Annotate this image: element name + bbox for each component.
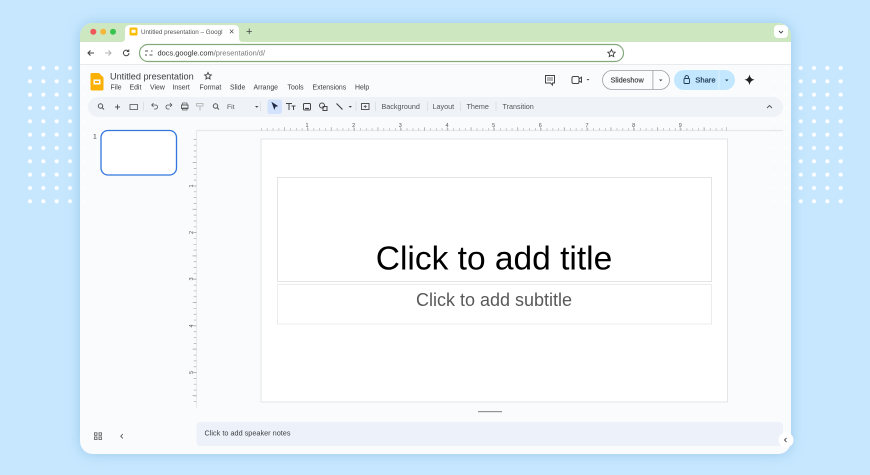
share button: Share bbox=[695, 76, 716, 84]
menu bar: View bbox=[150, 85, 165, 92]
browser window bbox=[80, 23, 794, 454]
url text: docs.google.com/presentation/d/ bbox=[158, 48, 266, 58]
slide thumbnail bbox=[101, 130, 176, 175]
horizontal ruler numbers: 2 bbox=[352, 123, 355, 129]
tab strip bbox=[80, 23, 791, 65]
slide canvas bbox=[261, 139, 728, 402]
slide number: 1 bbox=[93, 134, 97, 140]
collapse filmstrip icon bbox=[121, 434, 123, 438]
forward arrow bbox=[105, 50, 111, 56]
menu bar: Format bbox=[200, 85, 221, 92]
speaker notes bbox=[196, 422, 783, 446]
horizontal ruler numbers bbox=[305, 123, 682, 129]
horizontal ruler numbers: 5 bbox=[492, 123, 495, 129]
menu bar: Insert bbox=[172, 85, 190, 92]
menu bar: Arrange bbox=[254, 85, 278, 92]
toolbar labels: Transition bbox=[502, 102, 534, 111]
menu bar: Edit bbox=[130, 85, 141, 92]
zoom label: Fit bbox=[227, 104, 235, 111]
menu bar: File bbox=[110, 85, 122, 92]
active tab: × bbox=[229, 26, 234, 36]
docs logo bbox=[90, 73, 104, 90]
ruler bbox=[189, 123, 783, 408]
dot pattern left bbox=[23, 61, 77, 208]
subtitle placeholder: Click to add subtitle bbox=[416, 290, 572, 310]
menu bar: Slide bbox=[230, 85, 245, 92]
gemini sparkle bbox=[744, 74, 754, 85]
horizontal ruler numbers: 8 bbox=[632, 123, 635, 129]
vertical ruler numbers: 2 bbox=[189, 231, 195, 234]
site settings icon bbox=[145, 51, 152, 55]
dot pattern right bbox=[794, 61, 847, 208]
slideshow button: Slideshow bbox=[610, 76, 644, 84]
faint dots behind window bbox=[80, 61, 791, 208]
menu bar: Tools bbox=[288, 85, 304, 92]
vertical ticks bbox=[194, 139, 196, 402]
vertical ruler numbers: 3 bbox=[189, 277, 195, 281]
address bar bbox=[140, 44, 624, 62]
title placeholder bbox=[278, 178, 712, 282]
new tab button: + bbox=[246, 26, 252, 38]
vertical ruler numbers: 5 bbox=[189, 371, 195, 374]
title placeholder: Click to add title bbox=[376, 240, 612, 278]
notes resize handle bbox=[478, 411, 502, 412]
toolbar icons bbox=[98, 103, 219, 110]
grid view icon bbox=[94, 433, 102, 440]
toolbar separators bbox=[144, 102, 496, 111]
vertical ruler numbers bbox=[189, 184, 195, 374]
share button bbox=[674, 70, 735, 90]
horizontal ticks bbox=[261, 128, 727, 130]
toolbar labels: Layout bbox=[432, 102, 454, 111]
horizontal ruler numbers: 3 bbox=[399, 123, 402, 129]
tab menu button bbox=[774, 25, 788, 38]
horizontal ruler numbers: 1 bbox=[305, 123, 309, 129]
window controls bbox=[90, 29, 116, 35]
slideshow button bbox=[602, 70, 670, 90]
menu bar bbox=[110, 85, 369, 92]
horizontal ruler numbers: 4 bbox=[445, 123, 449, 129]
vertical ruler numbers: 4 bbox=[189, 324, 195, 328]
meet icon bbox=[572, 76, 590, 84]
title star bbox=[205, 72, 211, 79]
document title: Untitled presentation bbox=[110, 72, 194, 82]
toolbar labels: Background bbox=[382, 102, 420, 111]
toolbar bbox=[88, 97, 783, 117]
active tab bbox=[121, 25, 243, 42]
horizontal ruler numbers: 7 bbox=[585, 123, 589, 129]
selected cursor tool bbox=[268, 100, 282, 114]
horizontal ruler numbers: 9 bbox=[679, 123, 682, 129]
back arrow bbox=[88, 50, 94, 56]
bookmark star bbox=[608, 50, 615, 57]
address toolbar bbox=[80, 42, 791, 65]
vertical ruler numbers: 1 bbox=[189, 184, 195, 188]
drawing tools bbox=[286, 103, 369, 110]
toolbar labels bbox=[382, 102, 534, 111]
reload icon bbox=[123, 50, 129, 56]
subtitle placeholder bbox=[278, 284, 712, 324]
speaker notes: Click to add speaker notes bbox=[204, 428, 291, 438]
menu bar: Extensions bbox=[312, 85, 347, 92]
active tab: Untitled presentation – Googl bbox=[141, 29, 223, 36]
horizontal ruler numbers: 6 bbox=[539, 123, 542, 129]
collapse chevron bbox=[767, 106, 772, 108]
side panel toggle bbox=[778, 432, 794, 448]
toolbar labels: Theme bbox=[466, 102, 489, 111]
menu bar: Help bbox=[355, 85, 369, 92]
comment icon bbox=[546, 76, 554, 85]
